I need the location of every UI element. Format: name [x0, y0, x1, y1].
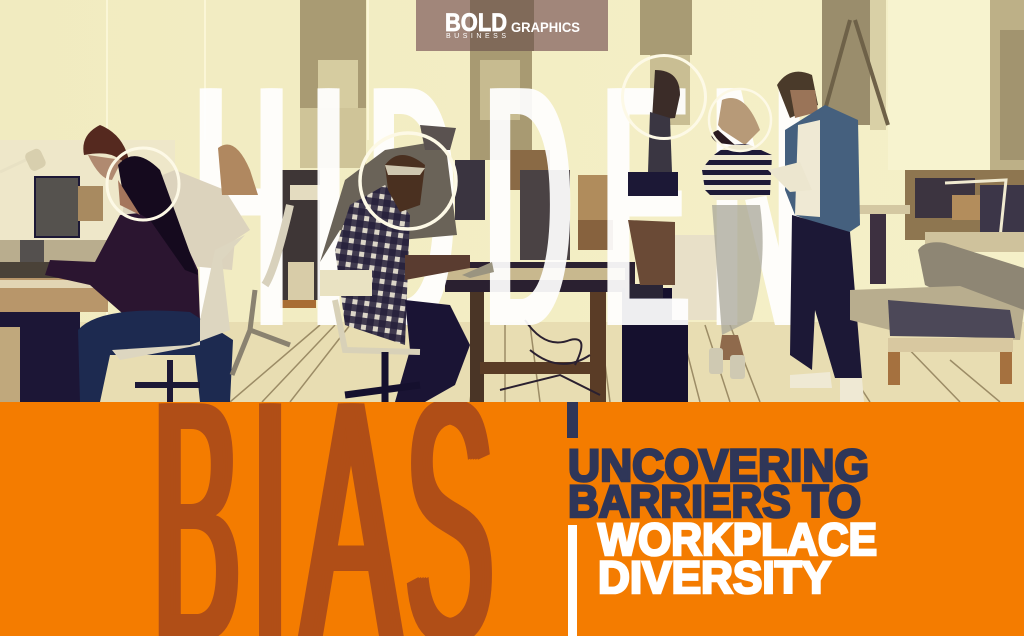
subtitle navy lines: [568, 440, 869, 527]
logo: Bold Business Graphics: BUSINESS: [446, 33, 506, 40]
person: woman in white top: [83, 125, 250, 270]
person: woman with dark hair at desk: [45, 156, 233, 402]
right office shelves: [850, 170, 1024, 284]
left office wall and desk: [0, 140, 175, 402]
subtitle white lines: WORKPLACE: [598, 514, 877, 565]
person: man with tablet: [768, 72, 864, 402]
heading: HIDDEN: D: [364, 14, 471, 398]
person: man standing at centre: [628, 70, 680, 285]
heading: HIDDEN: D: [480, 14, 587, 398]
photo: foreground people and furniture: [45, 54, 1024, 402]
logo: Bold Business Graphics: GRAPHICS: [511, 19, 580, 35]
subtitle navy lines: UNCOVERING: [568, 440, 869, 491]
circle highlights: [107, 56, 771, 229]
logo: Bold Business Graphics: BOLD: [445, 9, 507, 37]
floor: [0, 322, 1024, 402]
navy divider bar: [567, 402, 578, 438]
subtitle white lines: DIVERSITY: [598, 552, 831, 603]
person: blonde woman: [218, 144, 258, 195]
chair: white office chair: [112, 205, 290, 402]
person: woman in striped top: [702, 98, 772, 379]
white divider bar: [568, 525, 577, 636]
logo: Bold Business Graphics: [416, 0, 608, 51]
glass wall lines: [107, 0, 368, 402]
subtitle navy lines: BARRIERS TO: [568, 476, 861, 527]
photo: office background: [0, 0, 1024, 402]
subtitle white lines: [598, 514, 877, 603]
heading: HIDDEN: HI EN: [189, 14, 822, 398]
furniture: couch: [850, 242, 1024, 385]
window panes: [300, 0, 1024, 175]
mid office shelves and desks: [280, 150, 717, 402]
person: man in plaid shirt: [320, 155, 494, 402]
subtitle block: [567, 402, 877, 636]
person: man standing behind: [320, 125, 457, 262]
